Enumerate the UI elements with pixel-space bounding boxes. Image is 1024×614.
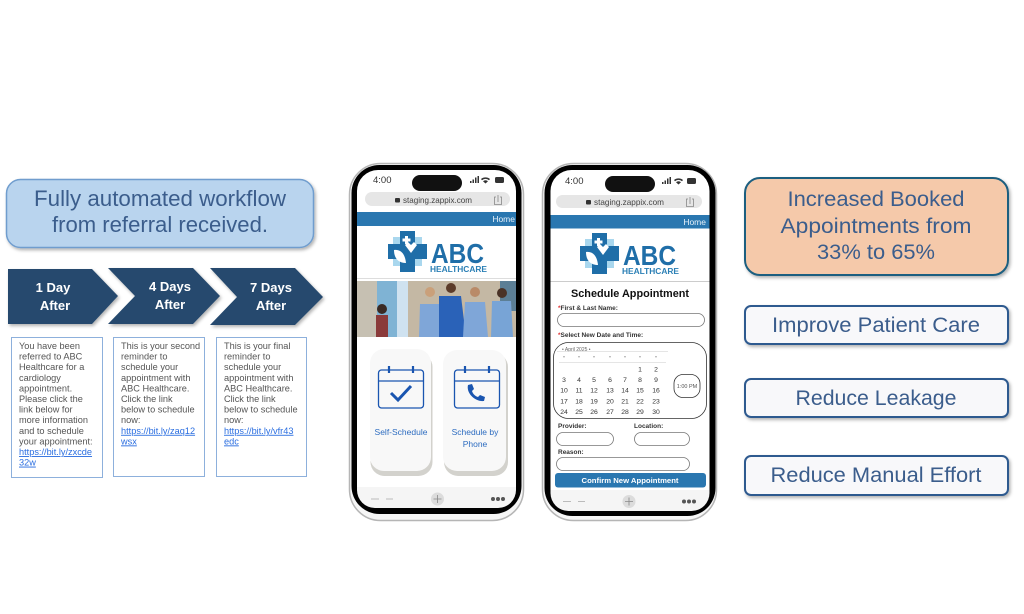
text block: first message: your appointment: <box>19 436 93 446</box>
field: reason <box>556 449 690 470</box>
calendar: 11 <box>575 388 583 394</box>
text block: second message: now: <box>121 415 140 425</box>
callout: increased booked appointments: Appointments from <box>780 214 972 238</box>
field: reason: Reason: <box>558 449 584 456</box>
text block: first message <box>12 338 102 478</box>
browser toolbar <box>357 487 516 508</box>
text block: first message: referred to ABC <box>19 352 83 362</box>
callout: increased booked appointments: 33% to 65% <box>817 240 935 264</box>
text block: second message <box>114 338 204 476</box>
nav band: Home <box>492 214 515 224</box>
logo: ABC Healthcare <box>388 231 488 274</box>
text block: third message: This is your final <box>224 341 290 351</box>
benefit: improve patient care <box>745 306 1008 344</box>
calendar: 13 <box>606 388 614 394</box>
calendar: • <box>639 354 641 360</box>
card: schedule by phone: Phone <box>463 439 488 449</box>
benefit: improve patient care: Improve Patient Care <box>772 313 980 337</box>
arrow: 7 days after <box>210 268 323 325</box>
text block: second message: below to schedule <box>121 405 195 415</box>
clinic logo: ABC <box>623 240 676 271</box>
text block: third message: schedule your <box>224 362 281 372</box>
text block: first message: appointment. <box>19 383 72 393</box>
calendar: 6 <box>608 377 612 384</box>
calendar: 5 <box>592 377 596 384</box>
address bar: staging.zappix.com <box>403 195 472 205</box>
icon: calendar check <box>378 366 424 408</box>
icon: dynamic island <box>412 175 462 191</box>
callout: increased booked appointments: Increased Booked <box>788 187 964 211</box>
url bar <box>556 195 702 208</box>
text block: third message: edc <box>224 436 239 446</box>
field: location: Location: <box>634 423 663 430</box>
url bar: staging.zappix.com <box>594 197 664 207</box>
calendar: 21 <box>621 398 629 406</box>
calendar <box>554 342 706 418</box>
text block: first message: cardiology <box>19 373 61 383</box>
signal icons <box>662 177 696 184</box>
text block: second message: ABC Healthcare. <box>121 383 189 393</box>
calendar: • <box>624 354 626 360</box>
text block: third message <box>216 338 306 476</box>
address bar <box>365 192 510 206</box>
calendar: 16 <box>652 388 660 394</box>
text block: second message: appointment with <box>121 373 190 383</box>
time pill: 1:00 PM <box>677 384 698 390</box>
card: self-schedule: Self-Schedule <box>375 427 428 437</box>
status time: 4:00 <box>373 175 392 186</box>
calendar: 19 <box>590 398 598 406</box>
button: confirm <box>555 473 706 488</box>
arrow: 4 days after <box>108 268 220 324</box>
card: schedule by phone <box>443 350 508 476</box>
logo: ABC Healthcare: ABC <box>431 238 484 269</box>
text block: first message: Please click the <box>19 394 83 404</box>
calendar: 30 <box>652 409 660 416</box>
calendar: 1 <box>638 366 642 374</box>
calendar: 24 <box>560 409 568 416</box>
label: date and time: *Select New Date and Time: <box>558 332 643 339</box>
arrow: 7 days after: 7 Days <box>250 280 292 295</box>
text block: first message: You have been <box>19 341 80 351</box>
panel: automated workflow heading <box>6 180 314 248</box>
text block: second message: wsx <box>120 436 137 446</box>
dynamic island <box>605 176 655 192</box>
calendar: • <box>578 354 580 360</box>
bottom toolbar <box>550 490 710 511</box>
text block: third message: below to schedule <box>224 405 298 415</box>
text block: first message: and to schedule <box>19 426 84 436</box>
time pill <box>674 374 700 398</box>
text block: third message: ABC Healthcare. <box>224 383 292 393</box>
panel: automated workflow heading: from referral received. <box>52 212 268 237</box>
calendar: • <box>563 354 565 360</box>
text block: first message: https://bit.ly/zxcde <box>19 447 92 457</box>
form title: Schedule Appointment <box>571 288 689 300</box>
status clock: 4:00 <box>565 176 584 187</box>
benefit: reduce leakage <box>745 379 1008 417</box>
text block: first message: more information <box>19 415 88 425</box>
calendar: 20 <box>606 398 614 406</box>
nav band <box>357 212 516 226</box>
field: name: *First & Last Name: <box>558 305 618 312</box>
text block: third message: now: <box>224 415 243 425</box>
card: schedule by phone: Schedule by <box>452 427 499 437</box>
calendar: 12 <box>590 388 598 394</box>
calendar: 25 <box>575 409 583 416</box>
text block: first message: 32w <box>19 458 36 468</box>
callout: increased booked appointments <box>745 178 1008 275</box>
calendar: • <box>593 354 595 360</box>
panel: automated workflow heading: Fully automated workflow <box>34 186 287 211</box>
calendar: 7 <box>623 377 627 384</box>
calendar: • <box>609 354 611 360</box>
calendar: • <box>655 354 657 360</box>
calendar: 26 <box>590 409 598 416</box>
arrow: 7 days after: After <box>256 298 286 313</box>
text block: second message: reminder to <box>121 352 167 362</box>
arrow: 1 day after <box>8 269 118 324</box>
home band <box>550 215 710 228</box>
calendar: 8 <box>638 377 642 384</box>
text block: first message: Healthcare for a <box>19 362 85 372</box>
calendar: 14 <box>621 388 629 394</box>
clinic logo <box>580 233 680 276</box>
benefit: reduce leakage: Reduce Leakage <box>796 386 956 410</box>
calendar: • April 2025 • <box>562 347 591 353</box>
calendar: 4 <box>577 377 581 384</box>
text block: first message: link below for <box>19 405 73 415</box>
home band: Home <box>683 217 706 227</box>
card: self-schedule <box>370 349 432 476</box>
clinic logo: HEALTHCARE <box>622 267 680 276</box>
field: provider <box>556 423 614 446</box>
logo: ABC Healthcare: HEALTHCARE <box>430 265 488 274</box>
icon: status icons <box>470 176 504 184</box>
calendar: 27 <box>606 409 614 416</box>
calendar: 22 <box>636 398 644 406</box>
photo: care team in hallway <box>357 281 516 337</box>
text block: third message: https://bit.ly/vfr43 <box>224 426 293 436</box>
field: provider: Provider: <box>558 423 587 430</box>
benefit: reduce manual effort <box>745 456 1008 495</box>
arrow: 4 days after: 4 Days <box>149 279 191 294</box>
calendar: 15 <box>636 388 644 394</box>
calendar: 2 <box>654 366 658 374</box>
field: location <box>634 423 690 446</box>
text block: second message: This is your second <box>121 341 200 351</box>
text block: second message: Click the link <box>121 394 173 404</box>
calendar: 29 <box>636 409 644 416</box>
calendar: 23 <box>652 398 660 406</box>
calendar: 18 <box>575 398 583 406</box>
calendar: 28 <box>621 409 629 416</box>
arrow: 4 days after: After <box>155 297 185 312</box>
text block: second message: https://bit.ly/zaq12 <box>121 426 195 436</box>
calendar: 17 <box>560 398 568 406</box>
benefit: reduce manual effort: Reduce Manual Effort <box>770 463 982 487</box>
icon: calendar phone <box>454 366 500 408</box>
calendar: 10 <box>560 388 568 394</box>
arrow: 1 day after: After <box>40 298 70 313</box>
arrow: 1 day after: 1 Day <box>36 280 71 295</box>
panel: phone home screen <box>350 164 524 520</box>
calendar: 3 <box>562 377 566 384</box>
field: name <box>558 305 704 326</box>
text block: third message: appointment with <box>224 373 293 383</box>
text block: third message: reminder to <box>224 352 270 362</box>
calendar: 9 <box>654 377 658 384</box>
text block: third message: Click the link <box>224 394 276 404</box>
text block: second message: schedule your <box>121 362 178 372</box>
panel: phone scheduling form <box>542 164 716 520</box>
button: confirm: Confirm New Appointment <box>582 478 679 485</box>
